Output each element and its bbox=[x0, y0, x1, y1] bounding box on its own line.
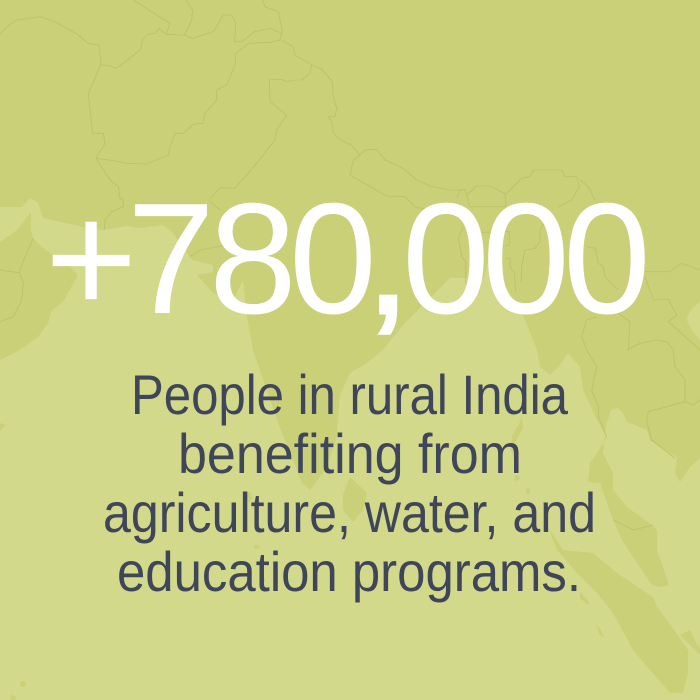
Sumatra bbox=[548, 527, 688, 693]
big number: +780,000 bbox=[45, 171, 651, 347]
line 3: agriculture, water, and bbox=[103, 481, 596, 544]
description text bbox=[103, 363, 596, 603]
small islands bbox=[0, 415, 700, 700]
Sri Lanka bbox=[343, 477, 367, 522]
country borders bbox=[0, 0, 350, 322]
line 1: People in rural India bbox=[131, 363, 569, 426]
line 2: benefiting from bbox=[178, 422, 522, 485]
Arabian peninsula bbox=[0, 212, 78, 360]
line 4: education programs. bbox=[117, 540, 581, 603]
